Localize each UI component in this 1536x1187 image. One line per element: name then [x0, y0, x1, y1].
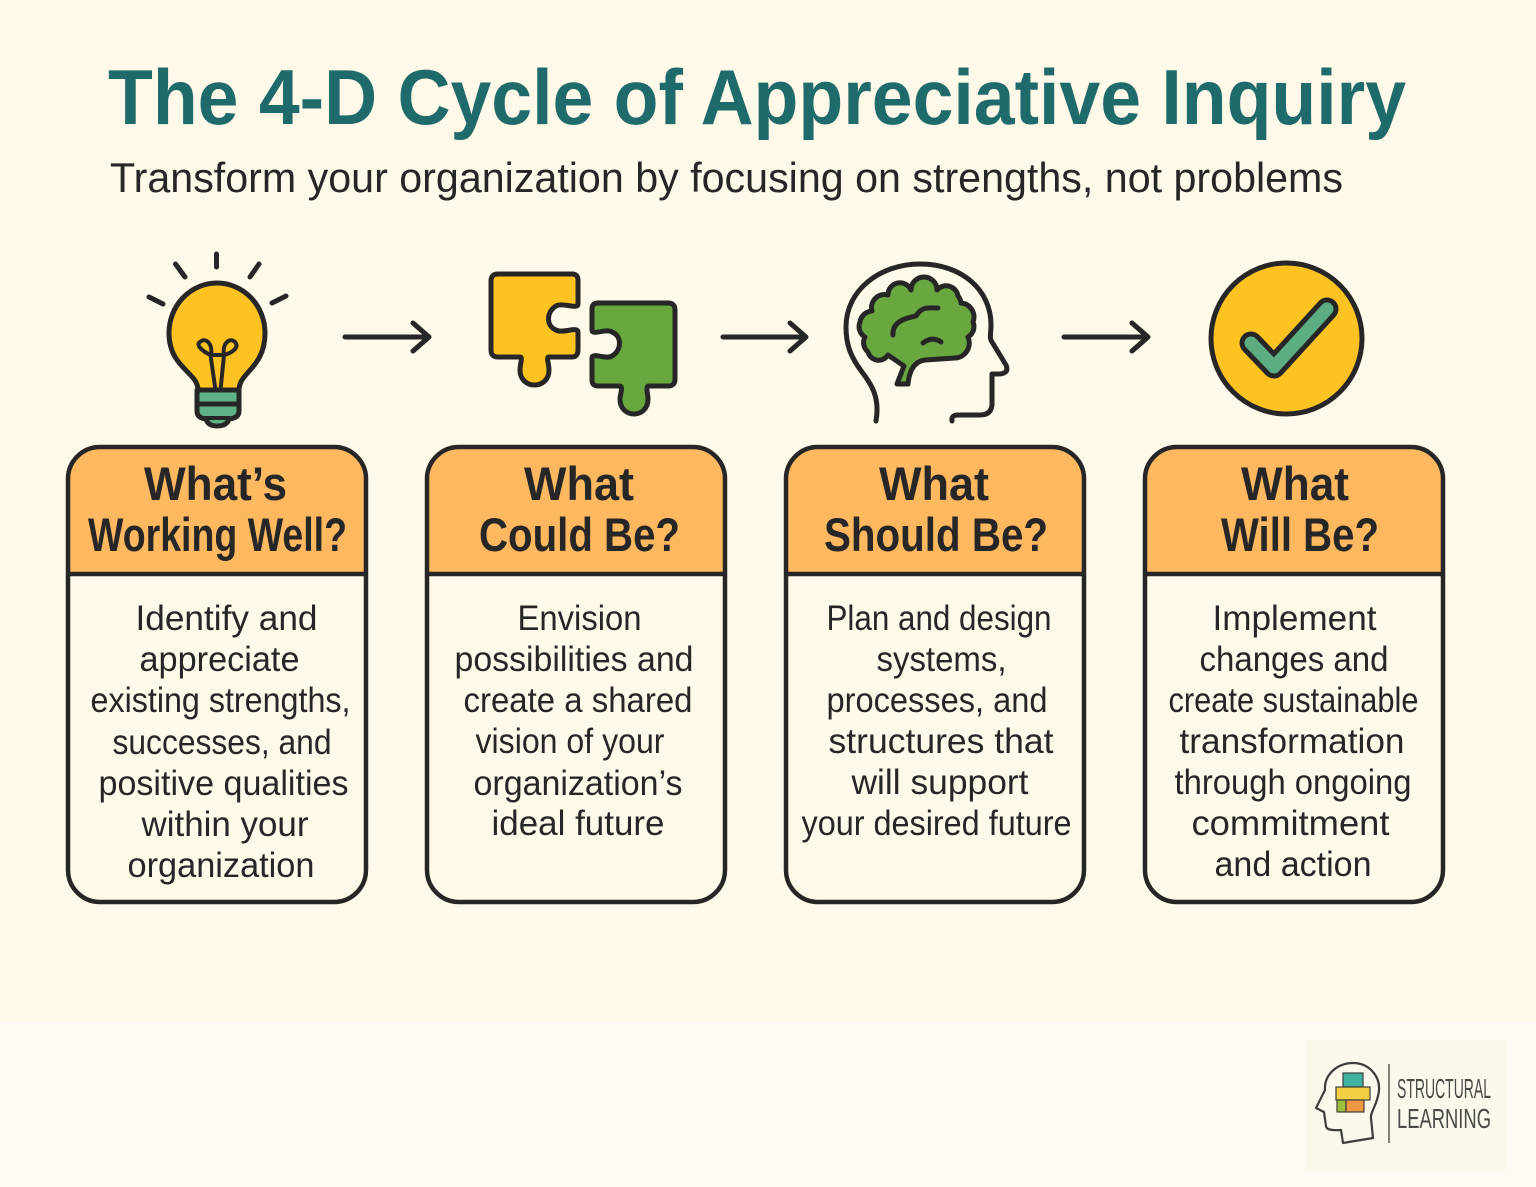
- heading: What: [1241, 457, 1349, 510]
- description: Identify and: [136, 599, 318, 638]
- panel: dream: [427, 447, 725, 902]
- header background: [786, 447, 1084, 574]
- description: changes and: [1200, 640, 1388, 679]
- heading: What’s: [144, 457, 287, 510]
- description: and action: [1214, 845, 1372, 884]
- description: commitment: [1192, 804, 1390, 843]
- description: appreciate: [140, 640, 300, 679]
- description: [90, 599, 350, 885]
- heading: What: [879, 457, 989, 510]
- heading: [1221, 457, 1379, 561]
- description: [1168, 599, 1418, 884]
- logo wordmark: LEARNING: [1397, 1103, 1491, 1134]
- description: positive qualities: [98, 764, 348, 803]
- description: Envision: [518, 599, 642, 638]
- description: [454, 599, 694, 843]
- panel: destiny: [1145, 447, 1443, 902]
- description: possibilities and: [454, 640, 694, 679]
- logo head outline: [1316, 1063, 1379, 1143]
- header background: [1145, 447, 1443, 574]
- subtitle: Transform your organization by focusing on strengths, not problems: [110, 154, 1343, 201]
- description: create a shared: [464, 681, 692, 720]
- description: ideal future: [492, 804, 664, 843]
- description: Plan and design: [826, 599, 1052, 638]
- logo blocks: [1336, 1073, 1370, 1112]
- card outline: [1145, 447, 1443, 902]
- icon: check mark: [1211, 263, 1362, 414]
- description: through ongoing: [1174, 763, 1412, 802]
- description: transformation: [1180, 722, 1404, 761]
- description: organization: [128, 846, 314, 885]
- heading: Should Be?: [824, 508, 1048, 561]
- title: The 4-D Cycle of Appreciative Inquiry: [108, 53, 1406, 141]
- card outline: [786, 447, 1084, 902]
- description: systems,: [876, 640, 1006, 679]
- logo: Structural Learning: [1306, 1040, 1506, 1172]
- panel: discover: [68, 447, 366, 902]
- heading: Working Well?: [88, 508, 347, 561]
- icon: head with brain: [846, 264, 1007, 421]
- icon: puzzle pieces: [491, 274, 675, 414]
- description: Implement: [1212, 599, 1377, 638]
- arrow 2: [723, 323, 806, 351]
- arrow 1: [345, 323, 429, 351]
- panel: design: [786, 447, 1084, 902]
- description: organization’s: [474, 764, 682, 803]
- card outline: [427, 447, 725, 902]
- description: create sustainable: [1168, 681, 1418, 720]
- description: your desired future: [802, 804, 1072, 843]
- card outline: [68, 447, 366, 902]
- logo wordmark: [1397, 1073, 1491, 1134]
- description: will support: [850, 763, 1029, 802]
- header background: [68, 447, 366, 574]
- description: [802, 599, 1072, 843]
- description: within your: [141, 805, 309, 844]
- description: structures that: [828, 722, 1054, 761]
- arrow 3: [1064, 323, 1148, 351]
- description: successes, and: [112, 723, 332, 762]
- header background: [427, 447, 725, 574]
- heading: Could Be?: [479, 508, 680, 561]
- heading: Will Be?: [1221, 508, 1379, 561]
- description: processes, and: [826, 681, 1048, 720]
- heading: What: [524, 457, 634, 510]
- heading: [88, 457, 347, 561]
- description: existing strengths,: [90, 681, 350, 720]
- icon: light bulb: [149, 254, 286, 426]
- heading: [824, 457, 1048, 561]
- description: vision of your: [476, 722, 665, 761]
- heading: [479, 457, 680, 561]
